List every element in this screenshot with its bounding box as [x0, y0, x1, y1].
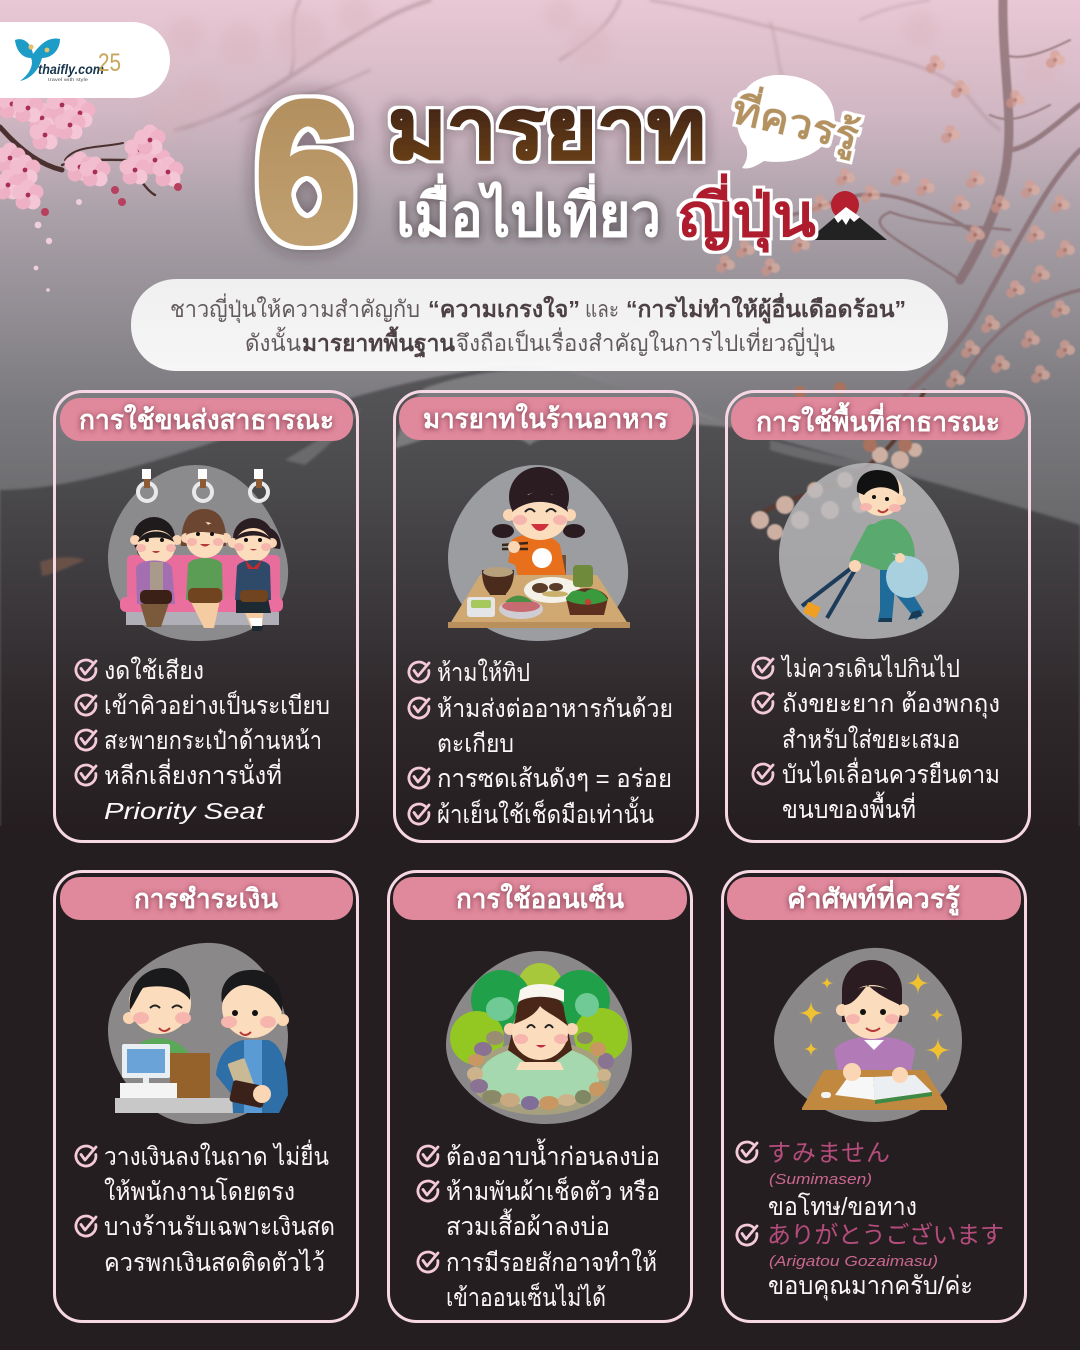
- checklist: การมีรอยสักอาจทำให้: [446, 1248, 657, 1277]
- heading: useful phrases: คำศัพท์ที่ควรรู้: [787, 879, 961, 916]
- illustration: cashier and customer: [108, 943, 289, 1124]
- intro pill: [131, 279, 948, 371]
- panel: public transport: [54, 392, 358, 842]
- heading: public transport: [60, 398, 353, 441]
- intro line one: “การไม่ทำให้ผู้อื่นเดือดร้อน”: [626, 292, 906, 324]
- logo badge: [0, 22, 170, 98]
- checklist: ไม่ควรเดินไปกินไป: [780, 654, 960, 683]
- intro line one: [170, 292, 906, 324]
- checklist: สะพายกระเป๋าด้านหน้า: [104, 727, 322, 755]
- cherry blossom branch: [0, 88, 184, 292]
- checklist: สวมเสื้อผ้าลงบ่อ: [446, 1208, 610, 1241]
- intro line one: และ: [585, 296, 619, 322]
- checklist: ตะเกียบ: [437, 730, 514, 758]
- illustration: three women on train seat: [108, 465, 288, 641]
- logo 25th anniversary mark: 25: [98, 49, 121, 77]
- illustration: woman studying: [774, 948, 962, 1122]
- phrase: arigatou gozaimasu: ありがとうございます: [767, 1221, 1004, 1249]
- checklist: สำหรับใส่ขยะเสมอ: [782, 725, 960, 754]
- checklist: ขนบของพื้นที่: [782, 791, 916, 824]
- panel: public spaces: [726, 392, 1030, 842]
- heading: public transport: การใช้ขนส่งสาธารณะ: [79, 404, 334, 435]
- checklist: ควรพกเงินสดติดตัวไว้: [104, 1248, 325, 1277]
- phrase: sumimasen: (Sumimasen): [769, 1171, 872, 1188]
- checklist: ต้องอาบน้ำก่อนลงบ่อ: [446, 1138, 660, 1171]
- intro line one: ชาวญี่ปุ่นให้ความสำคัญกับ: [170, 293, 420, 323]
- panel: onsen: [388, 872, 692, 1322]
- panel: payment: [54, 872, 358, 1322]
- icon: mount fuji with red sun: [808, 191, 887, 240]
- checklist: งดใช้เสียง: [104, 656, 204, 685]
- background: faint upper branches: [145, 0, 1056, 140]
- heading: payment: การชำระเงิน: [134, 884, 279, 914]
- heading: useful phrases: [727, 877, 1021, 920]
- title: first line: มารยาท: [388, 82, 706, 176]
- heading: restaurant manners: [399, 397, 693, 440]
- checklist: [76, 656, 330, 824]
- phrase: arigatou gozaimasu: ขอบคุณมากครับ/ค่ะ: [768, 1272, 973, 1301]
- heading: restaurant manners: มารยาทในร้านอาหาร: [423, 403, 668, 434]
- checklist: ห้ามให้ทิป: [437, 658, 530, 687]
- illustration: man collecting litter: [779, 463, 959, 639]
- background: mount fuji landscape: [0, 367, 1080, 1350]
- heading: public spaces: การใช้พื้นที่สาธารณะ: [756, 401, 1000, 437]
- tag text: ที่ควรรู้: [728, 81, 865, 162]
- intro line two: มารยาทพื้นฐาน: [302, 326, 455, 358]
- background: branch behind card three: [750, 382, 931, 540]
- title: number six: 6: [255, 61, 357, 284]
- heading: public spaces: [731, 397, 1025, 440]
- checklist: บางร้านรับเฉพาะเงินสด: [104, 1213, 335, 1241]
- checklist: ถังขยะยาก ต้องพกถุง: [782, 690, 1000, 719]
- heading: payment: [60, 877, 353, 920]
- heading: onsen: [393, 877, 687, 920]
- logo wordmark: thaifly.com: [38, 62, 104, 77]
- checklist: วางเงินลงในถาด ไม่ยื่น: [104, 1139, 329, 1171]
- checklist: บันไดเลื่อนควรยืนตาม: [782, 757, 1000, 789]
- checklist: Priority Seat: [104, 798, 266, 824]
- checklist: [409, 658, 673, 829]
- intro line two: ดังนั้น: [245, 327, 301, 356]
- checklist: [418, 1138, 660, 1312]
- phrase: sumimasen: [737, 1140, 917, 1221]
- title: second line: เมื่อไปเที่ยว: [396, 173, 661, 249]
- background: right cherry tree: [716, 0, 1080, 395]
- title: japan: ญี่ปุ่น: [678, 173, 816, 253]
- checklist: เข้าออนเซ็นไม่ได้: [446, 1282, 606, 1312]
- panel: restaurant manners: [394, 392, 698, 842]
- phrase: sumimasen: すみません: [767, 1140, 890, 1167]
- panel: useful phrases: [722, 872, 1026, 1322]
- checklist: [753, 654, 1000, 824]
- icon: butterfly logo: [15, 39, 60, 81]
- intro line two: [245, 326, 835, 358]
- checklist: ผ้าเย็นใช้เช็ดมือเท่านั้น: [437, 796, 654, 829]
- intro line one: “ความเกรงใจ”: [428, 295, 580, 322]
- checklist: ห้ามส่งต่ออาหารกันด้วย: [437, 695, 673, 723]
- checklist: ให้พนักงานโดยตรง: [104, 1177, 295, 1206]
- checklist: การซดเส้นดังๆ = อร่อย: [437, 765, 672, 793]
- illustration: girl eating: [448, 465, 630, 641]
- checklist: เข้าคิวอย่างเป็นระเบียบ: [104, 690, 330, 720]
- intro line two: จึงถือเป็นเรื่องสำคัญในการไปเที่ยวญี่ปุ่น: [456, 327, 835, 357]
- phrase: arigatou gozaimasu: [737, 1221, 1004, 1301]
- checklist: [76, 1139, 335, 1277]
- phrase: arigatou gozaimasu: (Arigatou Gozaimasu): [769, 1253, 938, 1270]
- speech bubble tag: [728, 75, 865, 169]
- phrase: sumimasen: ขอโทษ/ขอทาง: [768, 1192, 917, 1221]
- heading: onsen: การใช้ออนเซ็น: [456, 881, 625, 914]
- logo tagline: travel with style: [48, 77, 89, 82]
- illustration: woman in hot spring: [446, 951, 632, 1124]
- checklist: หลีกเลี่ยงการนั่งที่: [104, 758, 282, 790]
- checklist: ห้ามพันผ้าเช็ดตัว หรือ: [446, 1176, 660, 1206]
